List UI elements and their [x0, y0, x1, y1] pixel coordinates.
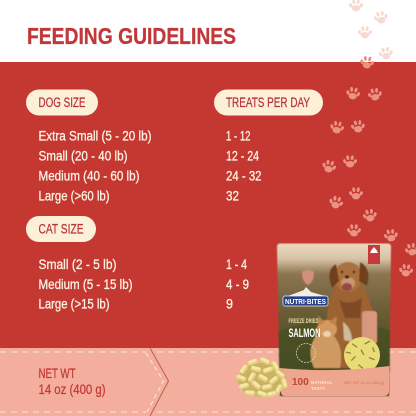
bag: product name: FREEZE DRIED [288, 319, 319, 325]
dog size list: Extra Small (5 - 20 lb) [38, 128, 152, 144]
pill: dog size [26, 90, 98, 116]
net weight: NET WT [38, 366, 76, 381]
paw print trail [320, 0, 416, 277]
bag: salmon bottom band: NATURAL [311, 380, 333, 385]
cat treats per day list: 9 [226, 296, 233, 312]
bag: salmon bottom band: TASTY [311, 386, 325, 391]
pill: cat size: CAT SIZE [38, 222, 84, 236]
dog size list: Small (20 - 40 lb) [38, 148, 128, 164]
net weight: 14 oz (400 g) [38, 382, 106, 397]
bottom band [0, 348, 416, 416]
cat size list [38, 257, 132, 312]
bag: brand badge: NUTRI·BITES [285, 297, 326, 306]
cat size list: Medium (5 - 15 lb) [38, 277, 132, 292]
dog treats per day list [226, 128, 262, 204]
bag: product name: SALMON [288, 328, 320, 340]
net weight [38, 366, 106, 397]
dog size list [38, 128, 152, 204]
bag: salmon bottom band: NET WT 14 oz (400 g) [344, 380, 385, 385]
red panel [0, 62, 416, 349]
bag: kibble window [344, 337, 380, 373]
title: FEEDING GUIDELINES [27, 23, 236, 49]
cat size list: Small (2 - 5 lb) [38, 257, 116, 272]
bag: product name [288, 319, 320, 340]
dog treats per day list: 32 [226, 188, 239, 204]
dog treats per day list: 12 - 24 [226, 148, 259, 164]
bag: salmon icon [296, 344, 316, 362]
pill: cat size [26, 216, 96, 242]
bag: salmon bottom band: 100 [292, 377, 309, 388]
dog size list: Medium (40 - 60 lb) [38, 168, 140, 184]
pill: dog size: DOG SIZE [38, 95, 86, 110]
cat treats per day list [226, 257, 249, 312]
pill: treats per day: TREATS PER DAY [226, 95, 310, 110]
dog treats per day list: 24 - 32 [226, 168, 262, 184]
product bag [277, 244, 391, 396]
cat size list: Large (>15 lb) [38, 296, 110, 312]
bag: brand badge [283, 287, 328, 306]
kibble pile [235, 356, 288, 398]
bag: maple leaf flag [368, 245, 380, 264]
cat treats per day list: 4 - 9 [226, 277, 249, 292]
dog treats per day list: 1 - 12 [226, 128, 250, 144]
bag: salmon bottom band [280, 366, 390, 396]
pill: treats per day [214, 90, 323, 116]
dog size list: Large (>60 lb) [38, 188, 110, 204]
cat treats per day list: 1 - 4 [226, 257, 247, 272]
